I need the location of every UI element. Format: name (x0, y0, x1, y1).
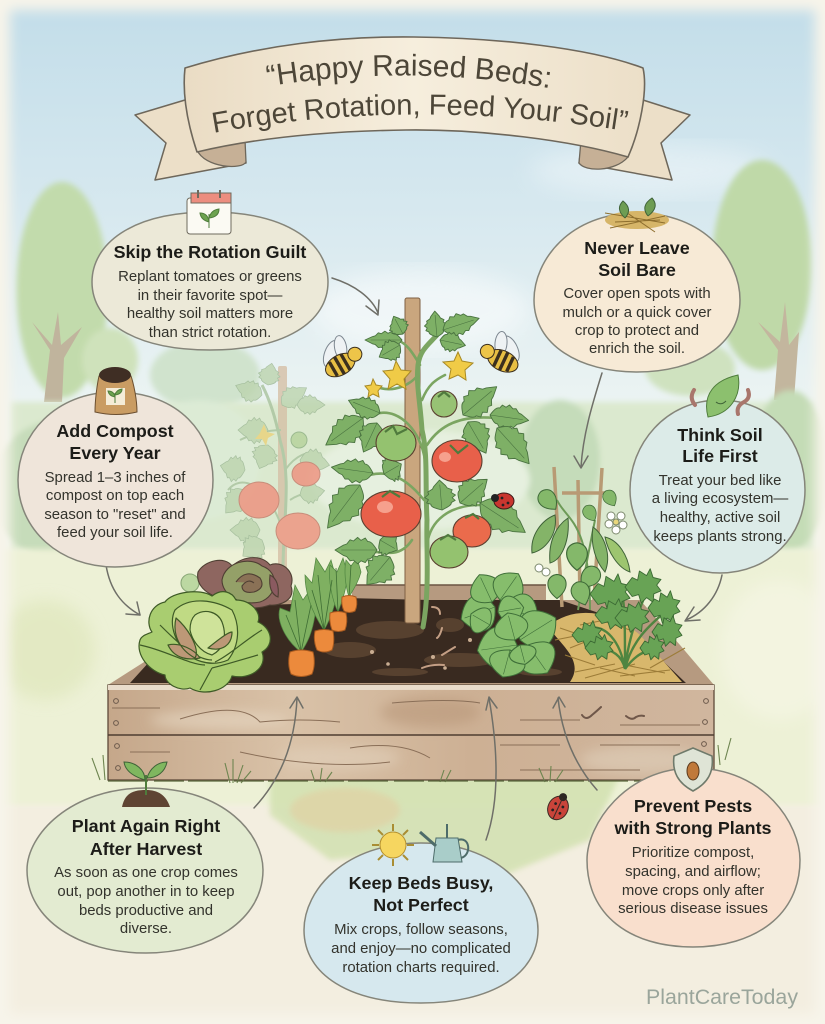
title text: “Happy Raised Beds: (266, 54, 550, 88)
icon: mulch nest (605, 198, 669, 232)
body text: rotation charts required. (342, 960, 500, 976)
heading: Plant Again Right (72, 816, 220, 836)
carrots (279, 558, 361, 676)
pea trellis (532, 467, 630, 610)
icon: leaf and worms (692, 375, 749, 417)
arrow: compost to bed (106, 565, 140, 615)
body text: Spread 1–3 inches of (45, 470, 186, 486)
heading: Think Soil (677, 425, 763, 445)
body text: and enjoy—no complicated (331, 941, 511, 957)
background lawn (0, 549, 825, 809)
panel: prevent pests with strong plants (587, 768, 800, 947)
body text: healthy, active soil (660, 510, 780, 526)
heading: Soil Bare (598, 260, 676, 280)
arrow: plant again (254, 697, 303, 808)
heading: Not Perfect (373, 895, 469, 915)
pea pods (532, 515, 630, 572)
banner main scroll (184, 37, 645, 157)
body text: mulch or a quick cover (563, 305, 712, 321)
banner right tail (579, 100, 690, 180)
background tree right (645, 160, 812, 396)
tomatoes (361, 391, 491, 568)
body text: compost on top each (46, 488, 184, 504)
panel: never leave soil bare (534, 213, 740, 372)
body text: feed your soil life. (57, 525, 173, 541)
heading: Every Year (69, 443, 161, 463)
icon: shield with bug (674, 748, 712, 791)
body text: serious disease issues (618, 901, 768, 917)
right bee (476, 325, 530, 377)
icon: compost bag (95, 367, 137, 414)
body text: a living ecosystem— (652, 491, 788, 507)
body text: spacing, and airflow; (625, 864, 761, 880)
body text: Prioritize compost, (632, 845, 754, 861)
heading: with Strong Plants (613, 818, 772, 838)
icon: seedling (122, 762, 170, 807)
pea flowers (535, 512, 627, 576)
parsley (572, 569, 682, 669)
body text: Mix crops, follow seasons, (334, 922, 508, 938)
body text: Cover open spots with (563, 286, 711, 302)
arrow: pests (553, 697, 597, 790)
straw mulch (548, 613, 685, 682)
body text: diverse. (120, 921, 172, 937)
icon: watering can (420, 824, 468, 862)
background tree left (16, 182, 260, 410)
body text: crop to protect and (575, 323, 699, 339)
icon: sun (372, 824, 414, 866)
arrow: soil life (685, 575, 722, 621)
tomato stake (405, 298, 420, 623)
stems (350, 335, 495, 627)
arrow: rotation to tomato (332, 278, 379, 315)
left bee (311, 328, 367, 382)
watermark: PlantCareToday (646, 986, 799, 1009)
body text: beds productive and (79, 903, 213, 919)
body text: keeps plants strong. (653, 529, 787, 545)
body text: move crops only after (622, 883, 764, 899)
body text: than strict rotation. (149, 325, 271, 341)
heading: After Harvest (90, 839, 202, 859)
carrot roots (289, 596, 357, 676)
tomato leaves (365, 331, 402, 350)
background tomato plant (216, 361, 332, 571)
carrot foliage (279, 558, 361, 652)
background hedge (0, 390, 825, 560)
green lettuce (139, 592, 270, 692)
body text: enrich the soil. (589, 341, 685, 357)
body text: in their favorite spot— (138, 288, 283, 304)
grass tufts (92, 738, 731, 783)
icon: calendar (187, 190, 231, 234)
tomato plant (315, 307, 541, 627)
arrow: mulch (574, 373, 602, 468)
body text: healthy soil matters more (127, 306, 293, 322)
ladybug on ground (544, 789, 574, 823)
body text: season to "reset" and (44, 507, 186, 523)
arrow: keep busy (486, 697, 497, 840)
purple lettuce (181, 558, 292, 608)
panel: keep beds busy, not perfect (304, 843, 538, 1003)
body text: As soon as one crop comes (54, 865, 238, 881)
panel: think soil life first (630, 400, 805, 573)
banner left tail (135, 100, 246, 180)
title banner (134, 36, 691, 181)
heading: Life First (682, 446, 758, 466)
ladybug on leaf (491, 493, 514, 509)
body text: Treat your bed like (659, 473, 781, 489)
bed back rim (108, 585, 714, 685)
basil (455, 564, 565, 683)
body text: Replant tomatoes or greens (118, 269, 302, 285)
panel: skip the rotation guilt (92, 212, 328, 350)
panel: plant again right after harvest (27, 788, 263, 953)
soil (130, 598, 686, 683)
title banner: Forget Rotation, Feed Your Soil” (212, 94, 628, 132)
panel: add compost every year (18, 392, 213, 567)
heading: Prevent Pests (634, 796, 752, 816)
heading: Never Leave (584, 238, 690, 258)
body text: out, pop another in to keep (57, 884, 235, 900)
heading: Skip the Rotation Guilt (114, 242, 306, 262)
yellow flowers (383, 361, 411, 389)
bed front planks (108, 685, 714, 780)
heading: Keep Beds Busy, (349, 873, 493, 893)
heading: Add Compost (56, 421, 174, 441)
raised bed (92, 585, 731, 783)
pea leaves (534, 486, 620, 608)
